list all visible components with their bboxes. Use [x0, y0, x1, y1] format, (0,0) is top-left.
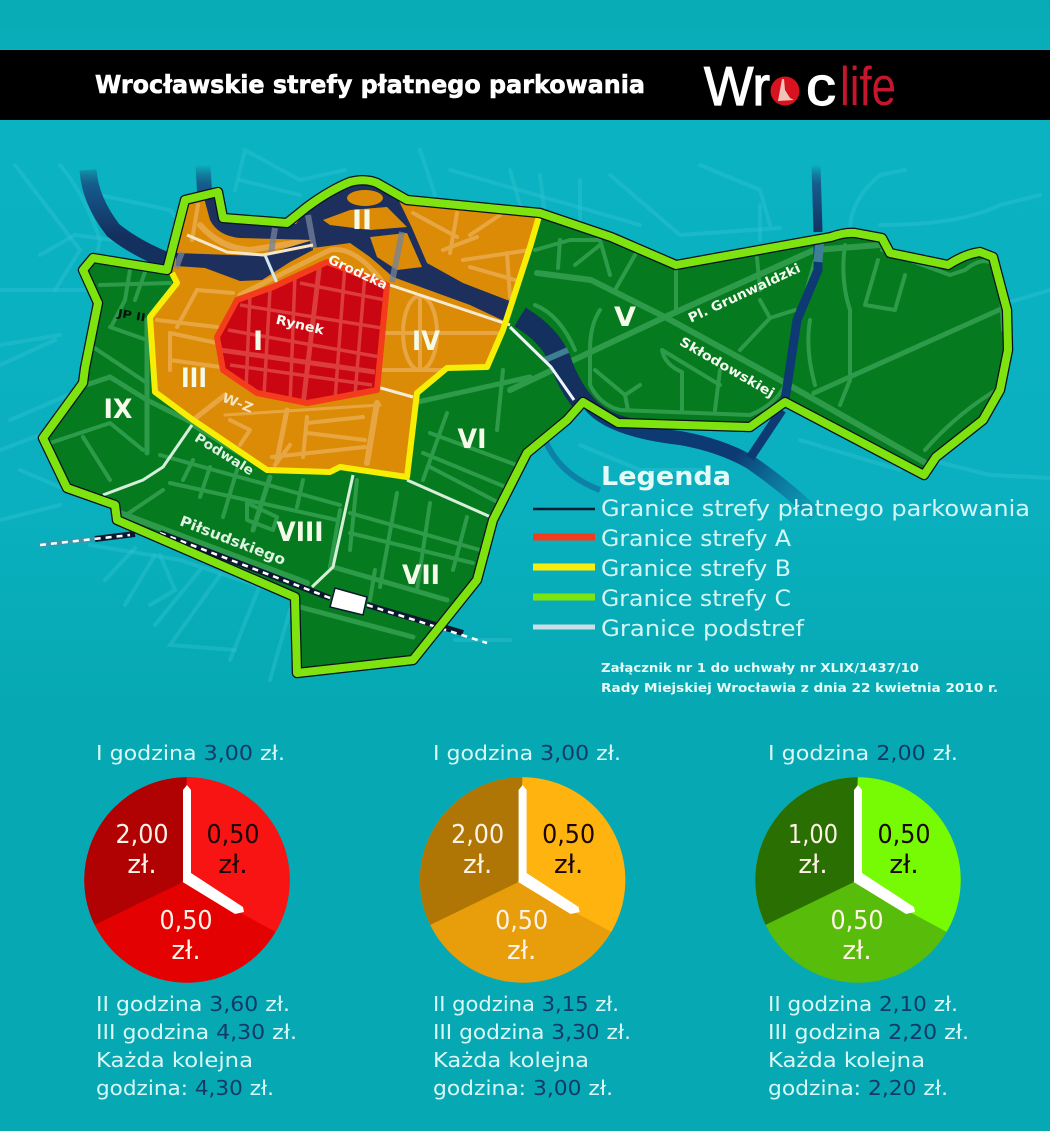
map of parking zones: [30, 170, 1030, 690]
street labels: W-Z: [220, 391, 255, 417]
zone C border: [43, 180, 1008, 673]
street labels: Pl. Grunwaldzki: [686, 261, 803, 326]
further hours prices: II godzina 3,60 zł.: [96, 992, 290, 1016]
further hours prices: II godzina 2,10 zł.: [768, 992, 958, 1016]
further hours prices: [768, 992, 969, 1100]
clock pie chart orange: [420, 777, 626, 983]
zone C green area: [49, 219, 1003, 668]
zone numerals: III: [181, 363, 207, 394]
clock pie chart green: [755, 777, 961, 983]
zone numerals: VII: [402, 560, 440, 591]
legend: zone A: Granice strefy A: [601, 526, 792, 552]
zone numerals: I: [253, 326, 263, 357]
further hours prices: Każda kolejna: [433, 1048, 589, 1072]
bridges: [176, 215, 402, 282]
clock pie chart green: 0,50: [830, 906, 884, 936]
legend: zone B: Granice strefy B: [601, 556, 791, 582]
logo Wroclife: life: [840, 55, 896, 117]
clock pie chart orange: 0,50: [495, 906, 548, 936]
price column: zone A: [80, 741, 300, 1100]
clock pie chart red: zł.: [218, 850, 248, 880]
legal note: [601, 660, 998, 695]
further hours prices: III godzina 2,20 zł.: [768, 1020, 969, 1044]
further hours prices: godzina: 4,30 zł.: [96, 1076, 274, 1100]
red zone streets: [220, 262, 385, 405]
river inside zones V and VI: [520, 317, 640, 430]
clock pie chart red: 2,00: [116, 820, 168, 850]
river islands: [323, 190, 422, 270]
street labels: Piłsudskiego: [177, 514, 288, 569]
street labels: JP II: [116, 307, 147, 324]
zone numerals: VI: [458, 424, 486, 455]
further hours prices: godzina: 3,00 zł.: [433, 1076, 613, 1100]
further hours prices: III godzina 4,30 zł.: [96, 1020, 297, 1044]
street labels: Rynek: [274, 313, 326, 338]
zone A red area: [217, 262, 387, 405]
street labels: Skłodowskiej: [677, 335, 777, 401]
price column: zone C: [751, 741, 971, 1100]
clock pie chart orange: zł.: [507, 936, 536, 966]
legal note: Rady Miejskiej Wrocławia z dnia 22 kwietnia 2010 r.: [601, 680, 998, 695]
lower river arm: [176, 240, 313, 281]
clock pie chart orange: zł.: [463, 850, 492, 880]
clock pie chart green: zł.: [798, 850, 828, 880]
further hours prices: [433, 992, 631, 1100]
street labels: [116, 253, 803, 569]
logo Wroclife: c: [806, 55, 836, 117]
title: Wrocławskie strefy płatnego parkowania: [95, 70, 645, 99]
legend: sub-zones: Granice podstref: [601, 616, 805, 642]
clock pie chart green: zł.: [889, 850, 919, 880]
zone numerals: II: [352, 205, 372, 236]
further hours prices: godzina: 2,20 zł.: [768, 1076, 948, 1100]
further hours prices: II godzina 3,15 zł.: [433, 992, 619, 1016]
zone numerals: [104, 205, 636, 591]
zone numerals: V: [614, 302, 636, 333]
logo Wroclife: Wr: [704, 55, 770, 117]
price column: zone B: [416, 741, 636, 1100]
clock pie chart red: 0,50: [206, 820, 260, 850]
river in zone B: [204, 186, 510, 320]
legal note: Załącznik nr 1 do uchwały nr XLIX/1437/10: [601, 660, 919, 675]
legend: [533, 462, 1030, 695]
further hours prices: [96, 992, 297, 1100]
clock pie chart red: zł.: [127, 850, 157, 880]
green zone streets: [50, 240, 1010, 637]
railway line: [40, 533, 487, 643]
zone numerals: IV: [412, 326, 440, 357]
further hours prices: Każda kolejna: [768, 1048, 925, 1072]
sub-zone borders: [103, 235, 574, 587]
clock pie chart orange: 2,00: [451, 820, 504, 850]
zone numerals: VIII: [276, 517, 324, 548]
legend: payment zone border: Granice strefy płatnego parkowania: [601, 496, 1030, 522]
further hours prices: Każda kolejna: [96, 1048, 253, 1072]
zone B border: [150, 213, 540, 477]
zone A border: [217, 262, 387, 403]
railway station: [330, 588, 367, 615]
rivers outside the zones: [88, 165, 818, 515]
header bar: [0, 50, 1050, 120]
background faint streets: [0, 150, 1050, 680]
further hours prices: III godzina 3,30 zł.: [433, 1020, 631, 1044]
legend heading: Legenda: [601, 462, 731, 492]
zone numerals: IX: [104, 394, 133, 425]
first hour price: I godzina 3,00 zł.: [433, 741, 621, 765]
clock pie chart red: [84, 777, 290, 983]
clock pie chart red: zł.: [171, 936, 201, 966]
orange zone streets: [157, 205, 530, 465]
clock pie chart red: 0,50: [160, 906, 212, 936]
clock pie chart orange: 0,50: [542, 820, 595, 850]
zone B orange area: [153, 186, 536, 474]
street labels: Podwale: [191, 431, 256, 479]
first hour price: I godzina 2,00 zł.: [768, 741, 958, 765]
legend: zone C: Granice strefy C: [601, 586, 791, 612]
clock pie chart orange: zł.: [554, 850, 583, 880]
street labels: Grodzka: [325, 253, 390, 293]
first hour price: I godzina 3,00 zł.: [96, 741, 285, 765]
clock pie chart green: 1,00: [788, 820, 838, 850]
clock pie chart green: zł.: [842, 936, 872, 966]
clock pie chart green: 0,50: [878, 820, 930, 850]
logo Wroclife: [704, 55, 896, 117]
